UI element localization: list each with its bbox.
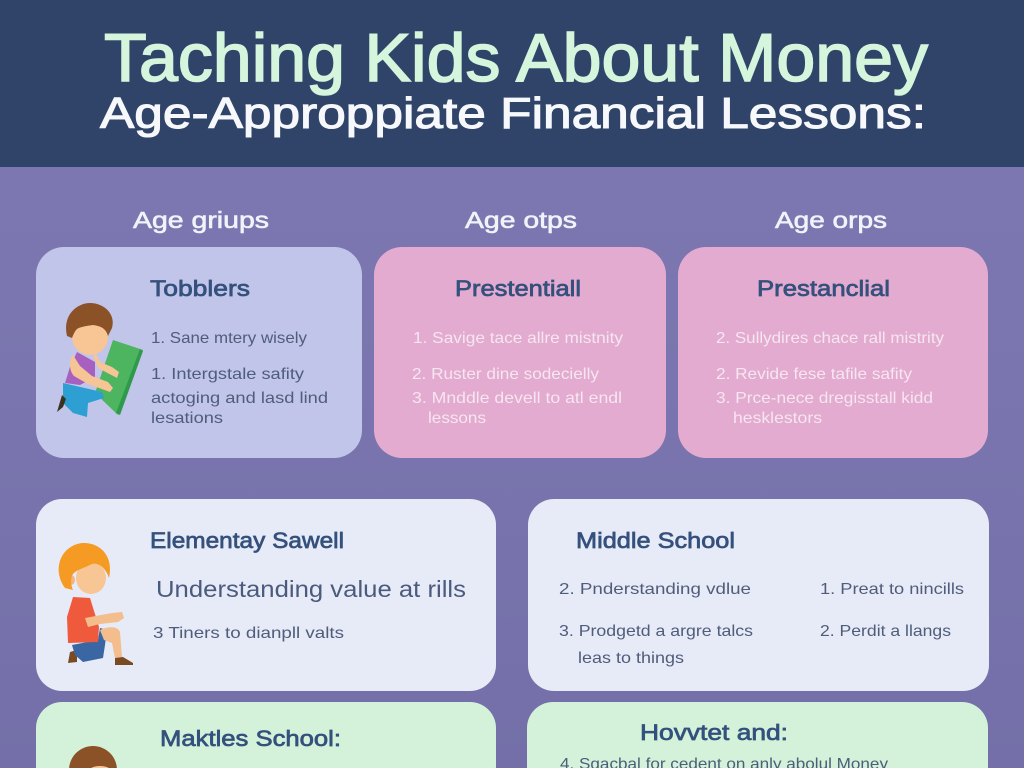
heading: Maktles School: [160,726,341,751]
left list: 3. Prodgetd a argre talcs [559,623,753,640]
heading: Hovvtet and: [640,720,788,745]
list: lesations [151,410,223,427]
list: 3. Prce-nece dregisstall kidd [716,390,933,407]
icon: child with green book [57,303,143,417]
list: 2. Ruster dine sodecielly [412,366,599,383]
list: 1. Sane mtery wisely [151,330,307,347]
heading: Prestentiall [455,276,581,301]
list: 3. Mnddle devell to atl endl [412,390,622,407]
left list: 2. Pnderstanding vdlue [559,581,751,598]
panel: prestential [374,247,666,458]
list [412,330,623,427]
right list: 2. Perdit a llangs [820,623,951,640]
right list [820,581,964,640]
panel: prestanclial [678,247,988,458]
icon: child with orange hair [59,543,133,665]
column label 2: Age otps [465,207,577,233]
list item: 3 Tiners to dianpll valts [153,625,344,642]
heading: Middle School [576,528,735,553]
heading: Prestanclial [757,276,890,301]
icon: child hair [69,746,117,768]
header banner [0,0,1024,167]
panel: maktles school [36,702,496,768]
left list: leas to things [578,650,684,667]
list: hesklestors [733,410,822,427]
column label 3: Age orps [775,207,887,233]
panel: middle school [528,499,989,691]
list: 2. Revide fese tafile safity [716,366,912,383]
panel: toddlers [36,247,362,458]
column label 1: Age griups [133,207,269,233]
heading: Elementay Sawell [150,528,344,553]
heading: Tobblers [150,276,250,301]
lead text: Understanding value at rills [156,576,466,602]
left list [559,581,753,667]
list: 2. Sullydires chace rall mistrity [716,330,944,347]
list: actoging and lasd lind [151,390,328,407]
panel: elementary [36,499,496,691]
list: lessons [428,410,486,427]
right list: 1. Preat to nincills [820,581,964,598]
list: 1. Intergstale safity [151,366,304,383]
subtitle: Age-Approppiate Financial Lessons: [100,89,926,138]
title: Taching Kids About Money [104,20,928,96]
list [716,330,944,427]
list [151,330,328,427]
panel: hovvtet and [527,702,988,768]
list: 1. Savige tace allre mistnity [413,330,623,347]
